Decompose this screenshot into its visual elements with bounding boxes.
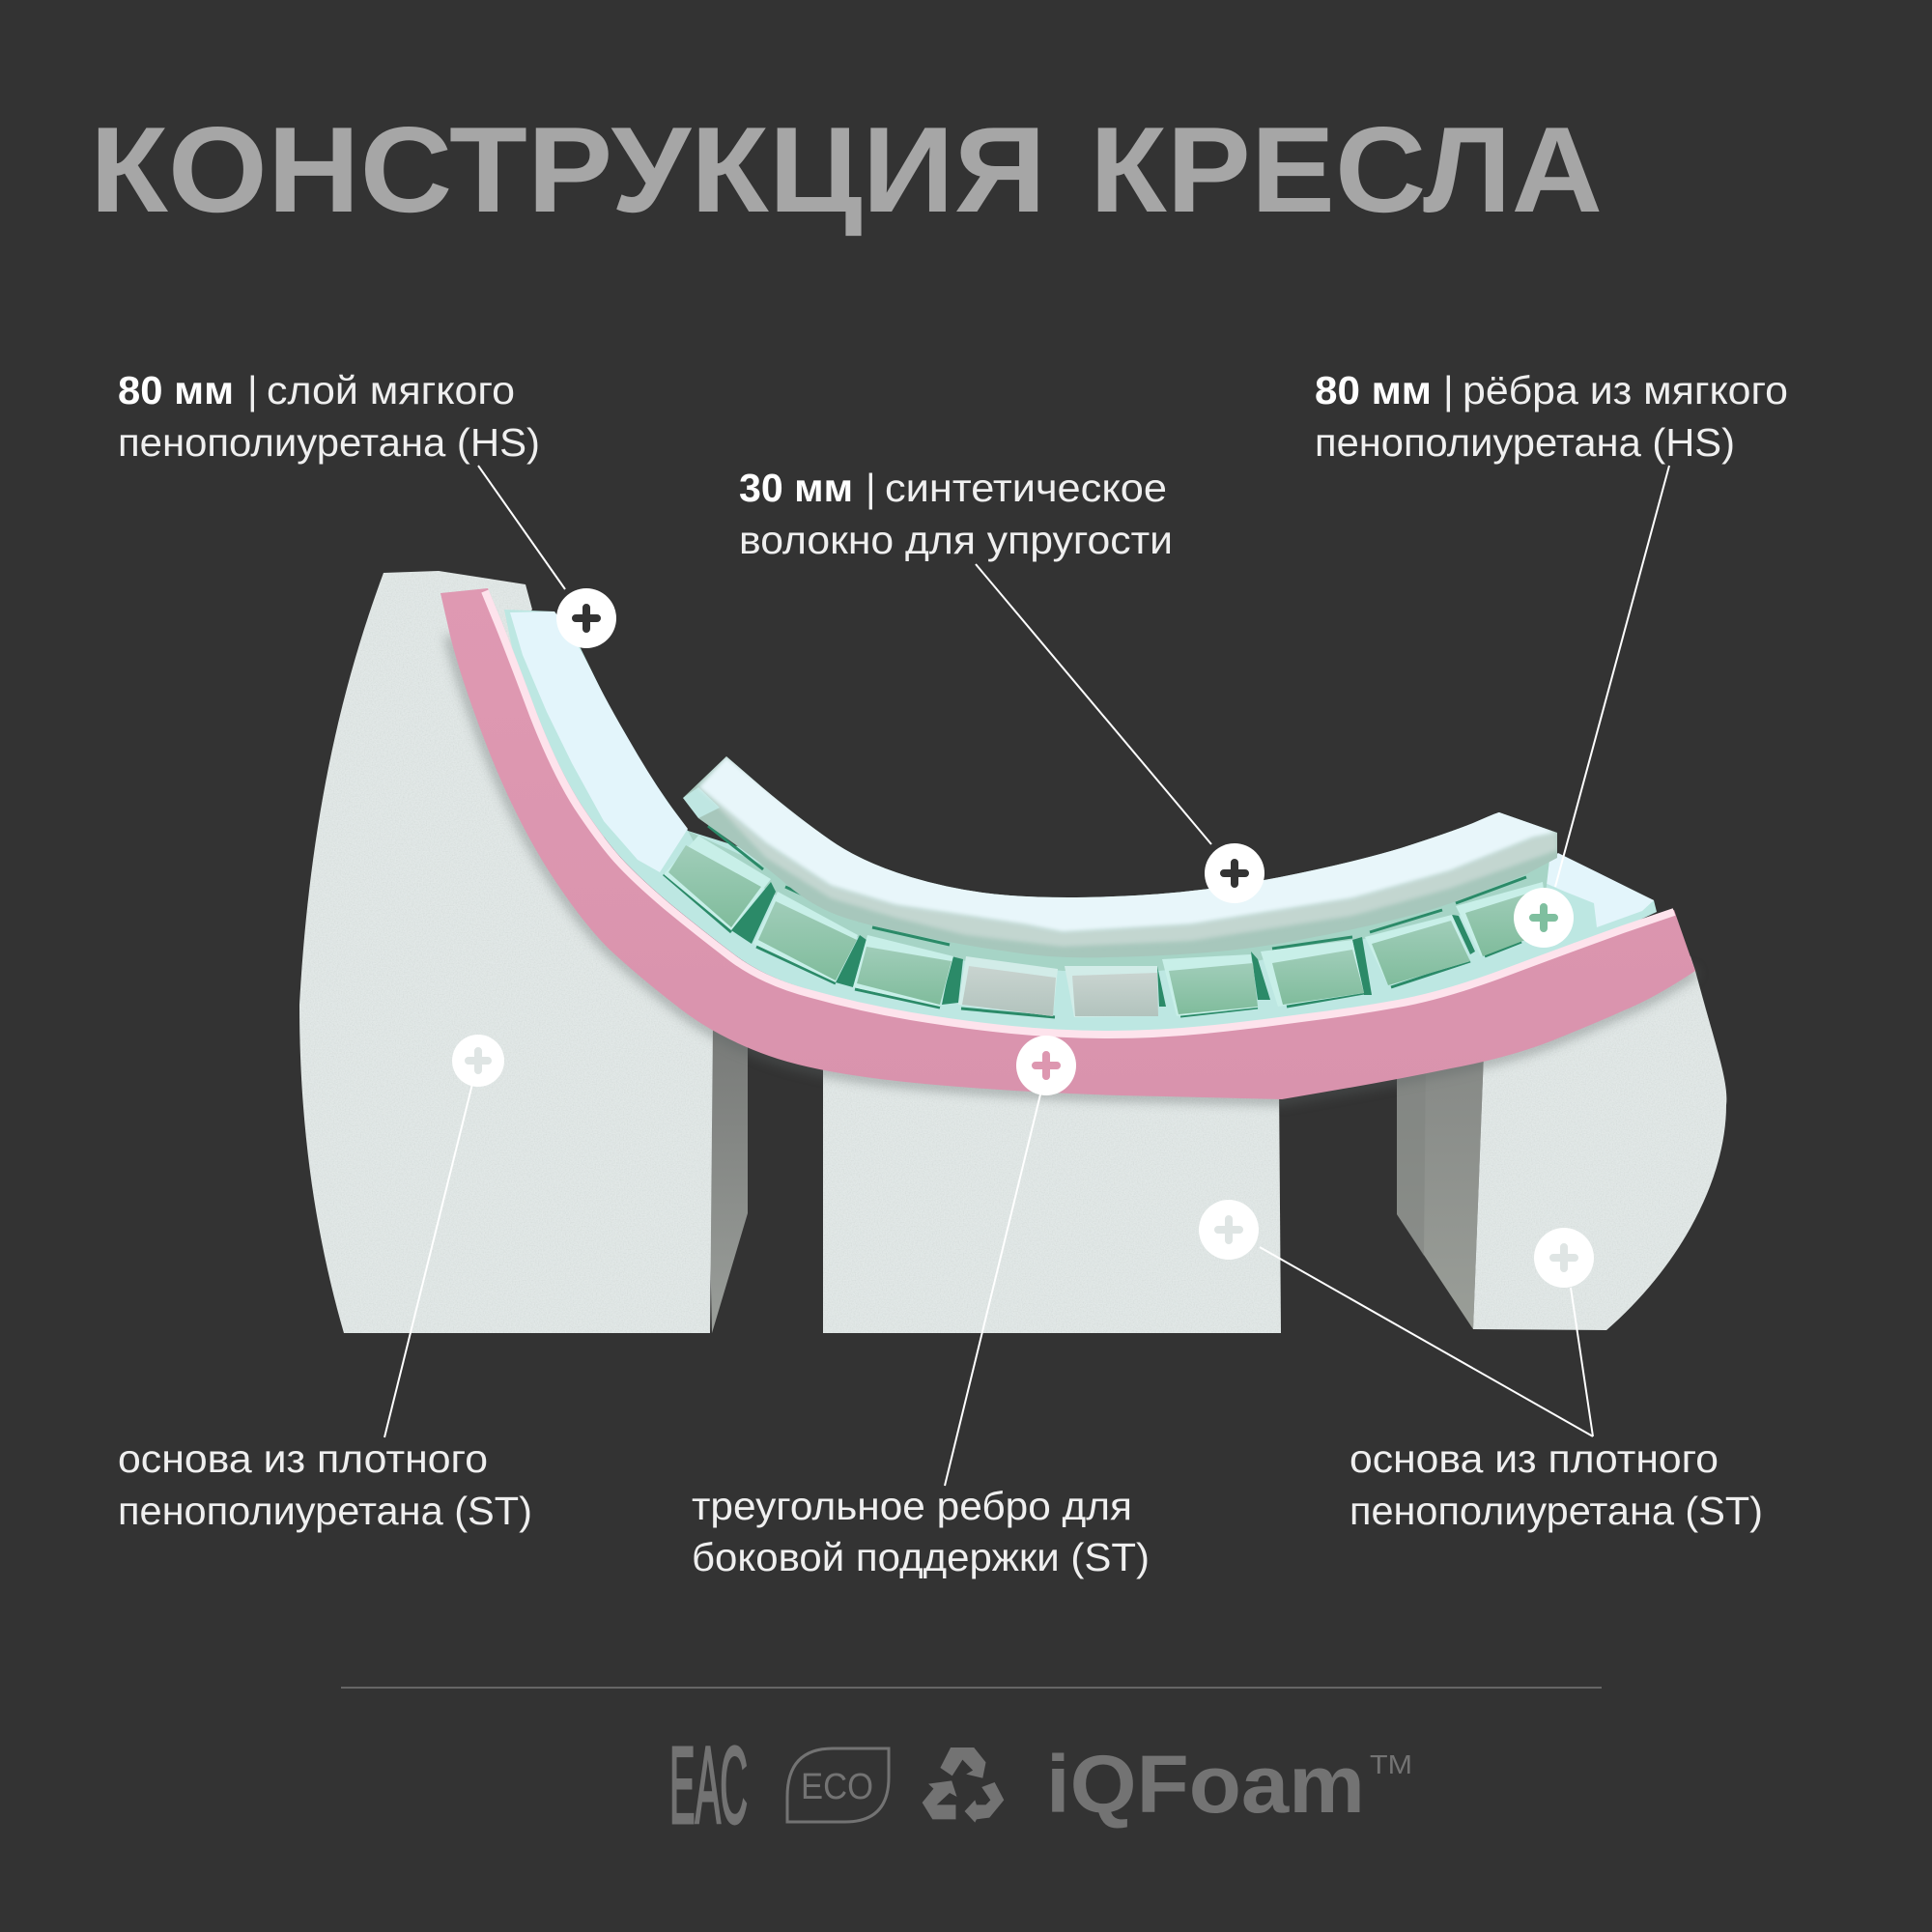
left base block side face (705, 1014, 748, 1333)
label: triangular rib (692, 1484, 1150, 1579)
logo: ECO leaf: ECO (801, 1767, 873, 1807)
chair cross-section diagram (299, 571, 1726, 1333)
label: 80 mm soft layer (118, 368, 540, 465)
label: left base: пенополиуретана (ST) (118, 1489, 532, 1533)
label: 30 mm fibre: | (866, 466, 876, 510)
marker: HS layer (556, 588, 616, 648)
leader line: right base (1571, 1288, 1593, 1436)
left base block (299, 571, 713, 1333)
label: right base: основа из плотного (1350, 1436, 1719, 1481)
label: 80 mm ribs: пенополиуретана (HS) (1315, 420, 1735, 465)
rib 4 (958, 956, 1058, 1016)
rib 5 (1065, 966, 1158, 1017)
title: КРЕСЛА (1090, 101, 1603, 238)
rib 9 (1456, 882, 1548, 956)
rib shadow lines (664, 826, 1526, 1017)
label: 80 mm soft layer: | (247, 368, 258, 412)
logo: trademark: TM (1370, 1749, 1412, 1779)
icon: recycling arrows (923, 1747, 1004, 1823)
label: 80 mm ribs: рёбра из мягкого (1463, 368, 1788, 412)
light blue foam layer (510, 611, 688, 872)
dark gaps between ribs (731, 882, 1475, 1007)
light blue foam right end (1531, 853, 1654, 927)
shadow under pink layer (450, 636, 1695, 1099)
synthetic fibre layer (683, 756, 1557, 958)
marker: fibre layer (1205, 843, 1264, 903)
centre base block (823, 1063, 1281, 1333)
marker: left base (452, 1035, 504, 1087)
label: 80 mm soft layer: 80 мм (118, 368, 234, 412)
rib 8 (1365, 915, 1470, 985)
leader line: left base (384, 1084, 472, 1437)
mint base of upper foam layer (504, 610, 1657, 1032)
label: triangular rib: треугольное ребро для (692, 1484, 1132, 1528)
rib 3 (853, 935, 953, 1007)
rib channel shade (688, 831, 1549, 971)
label: left base: основа из плотного (118, 1436, 488, 1481)
rib 6 (1162, 954, 1258, 1016)
logo: iQFoam wordmark: iQFoam (1046, 1739, 1365, 1830)
label: 30 mm fibre: волокно для упругости (739, 518, 1173, 562)
label: 80 mm soft layer: пенополиуретана (HS) (118, 420, 540, 465)
leader line: centre base (1260, 1247, 1593, 1436)
marker: HS ribs (1514, 888, 1574, 948)
title (90, 101, 1603, 238)
label: 80 mm ribs (1315, 368, 1788, 465)
label: left base (118, 1436, 532, 1533)
label: 30 mm fibre: 30 мм (739, 466, 853, 510)
pink layer: triangular rib (440, 588, 1695, 1099)
marker: right base (1534, 1228, 1594, 1288)
label: 30 mm fibre: синтетическое (885, 466, 1167, 510)
title: КОНСТРУКЦИЯ (90, 101, 1046, 238)
label: triangular rib: боковой поддержки (ST) (692, 1535, 1150, 1579)
leader line: HS ribs (1555, 466, 1669, 887)
label: 80 mm soft layer: слой мягкого (267, 368, 515, 412)
label: 80 mm ribs: | (1443, 368, 1454, 412)
marker: centre base (1199, 1200, 1259, 1260)
leader line: fibre layer (976, 564, 1211, 844)
marker: triangular rib (1016, 1036, 1076, 1095)
leader line: HS layer (478, 466, 565, 589)
label: 30 mm fibre (739, 466, 1173, 562)
rib 1 (664, 836, 771, 930)
label: 80 mm ribs: 80 мм (1315, 368, 1432, 412)
rib 7 (1261, 940, 1364, 1007)
right base block side face (1397, 1053, 1484, 1329)
label: right base: пенополиуретана (ST) (1350, 1489, 1763, 1533)
rib 2 (753, 892, 858, 982)
light pink strip (485, 591, 1674, 1035)
leader line: triangular rib (945, 1094, 1040, 1486)
right base block (1473, 956, 1726, 1330)
logo: ECO leaf (787, 1748, 889, 1822)
label: right base (1350, 1436, 1763, 1533)
text: ЕАС (669, 1724, 748, 1846)
